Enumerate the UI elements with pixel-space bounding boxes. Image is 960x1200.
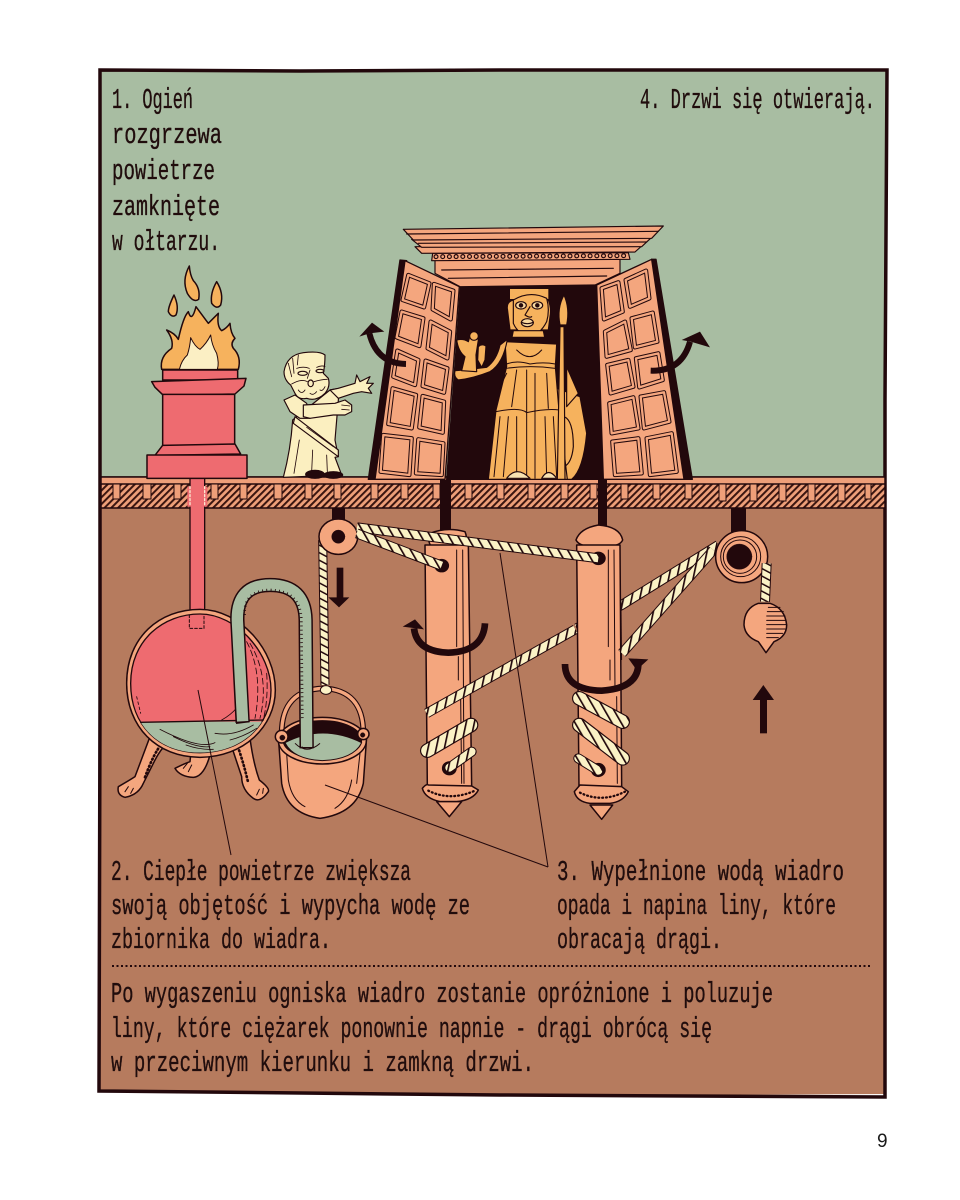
- panel: wall background: [100, 69, 887, 480]
- pulley rope 2 to post 1: [357, 533, 442, 566]
- text: step 3: [557, 856, 844, 957]
- door axles: [332, 480, 746, 558]
- arrow: right door opens: [651, 332, 710, 371]
- rope from right pulley to post 2: [622, 550, 713, 653]
- post 2 edge over rope: [618, 600, 624, 660]
- weight: [744, 603, 787, 653]
- long rope to post 1: [427, 629, 575, 713]
- text: step 1: 1. Ogień: [112, 84, 193, 117]
- rope coils post 2: [578, 698, 623, 771]
- water vessel and bucket system: [118, 519, 369, 818]
- philosopher: [283, 352, 373, 478]
- temple with doors and statue: [359, 226, 710, 480]
- text: step 1: w ołtarzu.: [112, 226, 220, 259]
- left pulley: [319, 519, 358, 554]
- text: closing note: w przeciwnym kierunku i zamkną drzwi.: [111, 1047, 534, 1080]
- rope coils post 1: [427, 725, 472, 768]
- arrow: left door opens: [359, 323, 406, 364]
- panel frame: [99, 70, 887, 1097]
- altar with fire and philosopher: [147, 266, 373, 610]
- text: step 1: powietrze: [112, 155, 215, 188]
- text: step 1: rozgrzewa: [112, 119, 222, 152]
- arrow: weight rises: [753, 685, 774, 733]
- dotted divider: [112, 965, 872, 967]
- arrow: bucket falls: [328, 568, 349, 607]
- arrow: post 2 rotates: [565, 658, 648, 691]
- lintel and cornice: [403, 226, 663, 287]
- text: step 2: zbiornika do wiadra.: [111, 924, 331, 957]
- bucket: [275, 688, 369, 818]
- rope behind second post: [577, 545, 718, 628]
- arrow: post 1 rotates: [403, 619, 485, 653]
- pulley rope 1 to post 2: [357, 527, 598, 558]
- panel: underground background: [99, 505, 885, 1096]
- text: step 2: swoją objętość i wypycha wodę ze: [111, 890, 470, 923]
- hot air pipe: [187, 478, 207, 610]
- right pulley: [716, 531, 768, 583]
- posts ropes and weight: [357, 525, 787, 819]
- text: step 1: zamknięte: [112, 191, 220, 224]
- floor with hatching and posts: [101, 477, 885, 508]
- icon: fire: [161, 266, 239, 369]
- page number: 9: [877, 1131, 888, 1152]
- right door: [597, 259, 692, 479]
- left door: [368, 260, 459, 479]
- text: step 1: [112, 84, 222, 259]
- post 1: [422, 530, 478, 817]
- post 2: [574, 525, 628, 819]
- altar: [147, 370, 247, 478]
- temple interior: [446, 285, 603, 480]
- vessel legs: [118, 734, 269, 800]
- text: step 2: [111, 856, 470, 957]
- rope to weight: [765, 563, 767, 602]
- text: step 3: obracają drągi.: [557, 924, 722, 957]
- text: closing note: [111, 978, 773, 1080]
- text: step 2: 2. Ciepłe powietrze zwiększa: [111, 856, 411, 889]
- leader lines: [198, 553, 548, 867]
- spherical vessel: [127, 609, 277, 758]
- rope to bucket: [320, 540, 332, 694]
- statue of Athena: [455, 289, 587, 479]
- green tube: [236, 585, 320, 749]
